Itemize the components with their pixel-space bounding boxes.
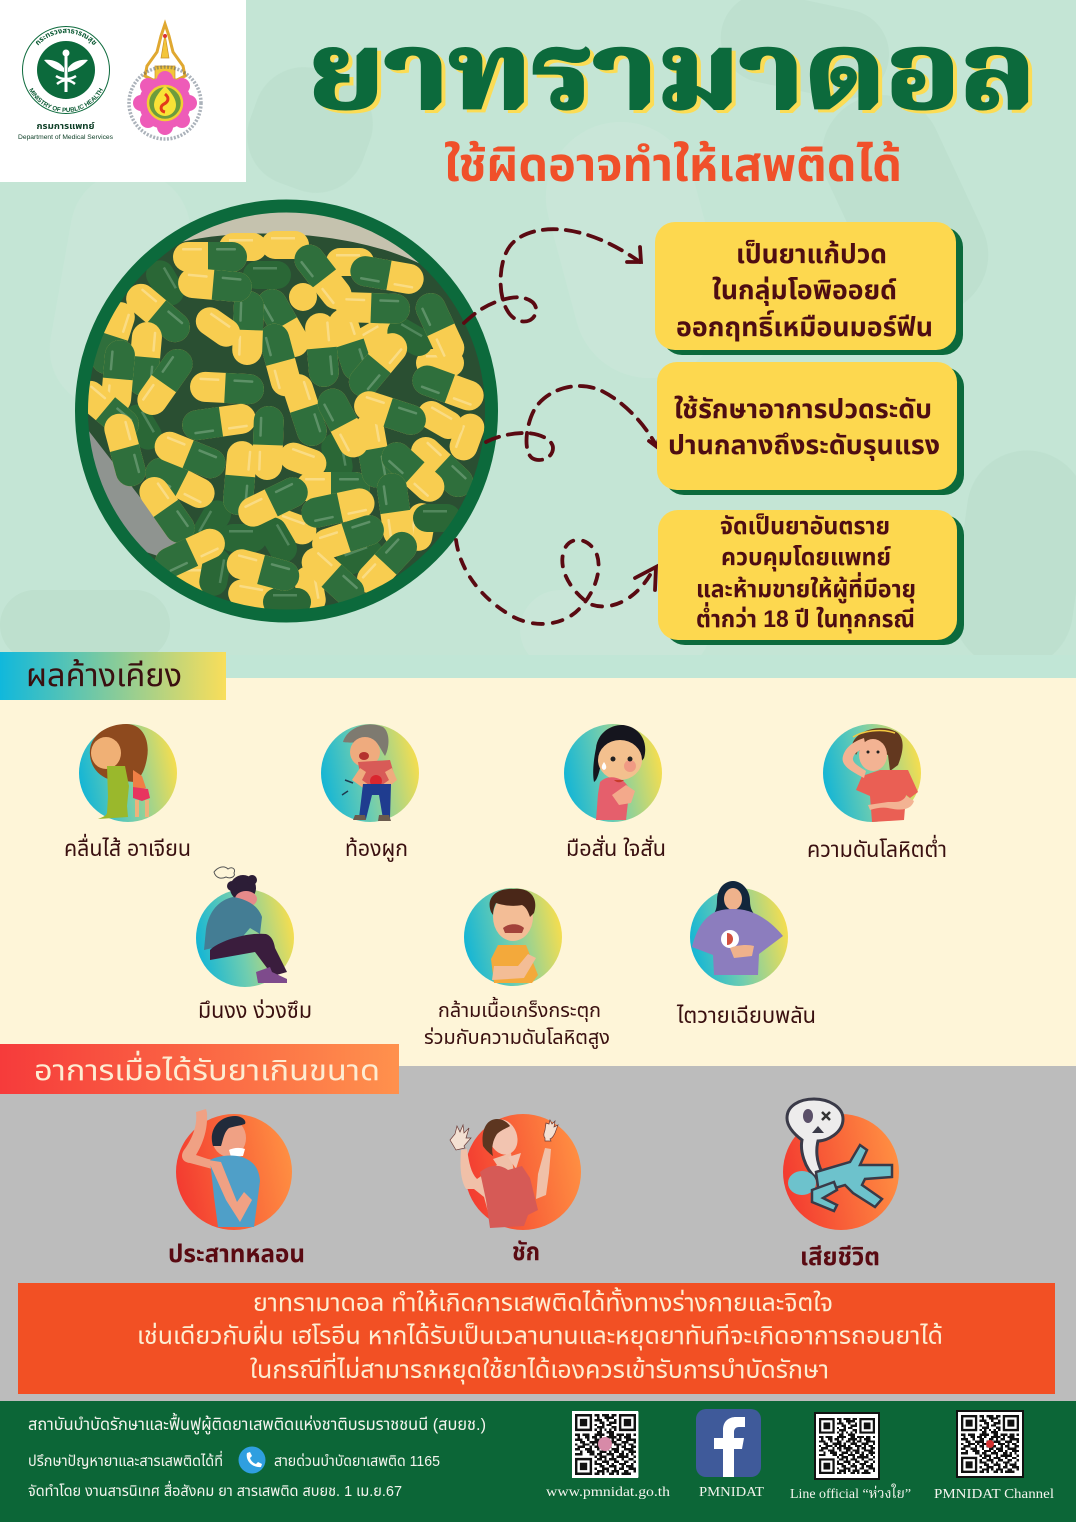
panel: side effects bbox=[0, 652, 1076, 1066]
info card 2: ใช้รักษาอาการปวดระดับ bbox=[674, 394, 932, 424]
item: muscle spasm: ร่วมกับความดันโลหิตสูง bbox=[424, 1026, 610, 1050]
item: muscle spasm bbox=[424, 888, 610, 1050]
arrow 3 bbox=[456, 540, 656, 624]
footer text: credit: จัดทำโดย งานสารนิเทศ สื่อสังคม ยา สารเสพติด สบยช. 1 เม.ย.67 bbox=[28, 1480, 402, 1500]
item: seizure: ชัก bbox=[512, 1238, 540, 1266]
title: ยาทรามาดอล bbox=[312, 17, 1040, 134]
footer bbox=[0, 1401, 1076, 1522]
item: dizziness and drowsiness bbox=[196, 867, 312, 1023]
heading: side effects: ผลค้างเคียง bbox=[26, 657, 182, 693]
info card 1: ในกลุ่มโอพิออยด์ bbox=[712, 275, 897, 306]
item: death bbox=[783, 1099, 899, 1271]
info card 2: ปานกลางถึงระดับรุนแรง bbox=[668, 430, 940, 461]
heading: overdose symptoms bbox=[0, 1044, 399, 1094]
qr: channel: PMNIDAT Channel bbox=[934, 1487, 1054, 1502]
item: tremor and palpitations bbox=[564, 724, 666, 861]
background: pale mint capsule photo bbox=[0, 0, 1076, 680]
qr: channel bbox=[934, 1411, 1054, 1502]
info card 2 bbox=[657, 362, 964, 495]
logo panel bbox=[0, 0, 246, 222]
logo: princess mother institute lotus bbox=[129, 24, 201, 139]
item: death: เสียชีวิต bbox=[800, 1243, 880, 1271]
info card 3: ต่ำกว่า 18 ปี ในทุกกรณี bbox=[696, 602, 915, 634]
logo: ministry of public health: กระทรวงสาธารณสุข bbox=[36, 28, 96, 46]
arrow 1 bbox=[464, 229, 641, 323]
qr: website: www.pmnidat.go.th bbox=[546, 1485, 670, 1500]
item: nausea and vomiting bbox=[64, 724, 191, 861]
info card 1 bbox=[655, 222, 963, 355]
item: constipation: ท้องผูก bbox=[345, 836, 408, 862]
qr: line official bbox=[790, 1413, 911, 1502]
item: muscle spasm: กล้ามเนื้อเกร็งกระตุก bbox=[438, 996, 601, 1022]
item: low blood pressure bbox=[807, 724, 947, 862]
item: acute kidney failure bbox=[676, 881, 816, 1028]
logo: ministry of public health: กรมการแพทย์ bbox=[36, 121, 95, 131]
warning callout: ยาทรามาดอล ทำให้เกิดการเสพติดได้ทั้งทางร่างกายและจิตใจ bbox=[253, 1286, 833, 1317]
warning callout: ในกรณีที่ไม่สามารถหยุดใช้ยาได้เองควรเข้ารับการบำบัดรักษา bbox=[250, 1352, 829, 1385]
footer text: hotline: สายด่วนบำบัดยาเสพติด 1165 bbox=[274, 1452, 440, 1470]
item: hallucination: ประสาทหลอน bbox=[168, 1240, 305, 1268]
info card 3: จัดเป็นยาอันตราย bbox=[720, 513, 890, 540]
subtitle: ใช้ผิดอาจทำให้เสพติดได้ bbox=[444, 138, 902, 191]
item: seizure bbox=[450, 1114, 581, 1266]
logo: ministry of public health bbox=[18, 26, 114, 141]
logo: ministry of public health: MINISTRY OF PUBLIC HEALTH bbox=[29, 88, 103, 112]
panel: overdose symptoms bbox=[0, 1044, 1076, 1401]
item: acute kidney failure: ไตวายเฉียบพลัน bbox=[676, 1003, 816, 1028]
item: constipation bbox=[321, 724, 419, 862]
heading: side effects bbox=[0, 652, 226, 700]
item: tremor and palpitations: มือสั่น ใจสั่น bbox=[566, 834, 666, 861]
logo: ministry of public health: Department of Medical Services bbox=[18, 134, 114, 141]
arrow 2 bbox=[486, 386, 661, 460]
item: hallucination bbox=[168, 1109, 305, 1268]
item: low blood pressure: ความดันโลหิตต่ำ bbox=[807, 834, 947, 862]
icon: phone bbox=[238, 1446, 266, 1474]
info card 3 bbox=[658, 510, 964, 645]
title: ยาทรามาดอล bbox=[308, 14, 1036, 131]
heading: overdose symptoms: อาการเมื่อได้รับยาเกินขนาด bbox=[34, 1050, 380, 1087]
icon: facebook bbox=[696, 1409, 764, 1500]
info card 3: ควบคุมโดยแพทย์ bbox=[721, 544, 891, 572]
info card 3: และห้ามขายให้ผู้ที่มีอายุ bbox=[696, 572, 916, 604]
warning callout: เช่นเดียวกับฝิ่น เฮโรอีน หากได้รับเป็นเวลานานและหยุดยาทันทีจะเกิดอาการถอนยาได้ bbox=[137, 1319, 943, 1351]
qr: website bbox=[546, 1411, 670, 1500]
item: nausea and vomiting: คลื่นไส้ อาเจียน bbox=[64, 833, 191, 861]
footer text: institute name: สถาบันบำบัดรักษาและฟื้นฟูผู้ติดยาเสพติดแห่งชาติบรมราชชนนี (สบยช.) bbox=[28, 1412, 486, 1436]
footer text: consult: ปรึกษาปัญหายาและสารเสพติดได้ที่ bbox=[28, 1450, 223, 1470]
info card 1: เป็นยาแก้ปวด bbox=[736, 239, 887, 269]
capsule photo in round frame bbox=[69, 205, 500, 625]
warning callout bbox=[18, 1283, 1055, 1394]
qr: line official: Line official “ห่วงใย” bbox=[790, 1483, 911, 1502]
info card 1: ออกฤทธิ์เหมือนมอร์ฟีน bbox=[676, 310, 933, 342]
icon: facebook: PMNIDAT bbox=[699, 1485, 764, 1500]
item: dizziness and drowsiness: มึนงง ง่วงซึม bbox=[198, 998, 312, 1023]
